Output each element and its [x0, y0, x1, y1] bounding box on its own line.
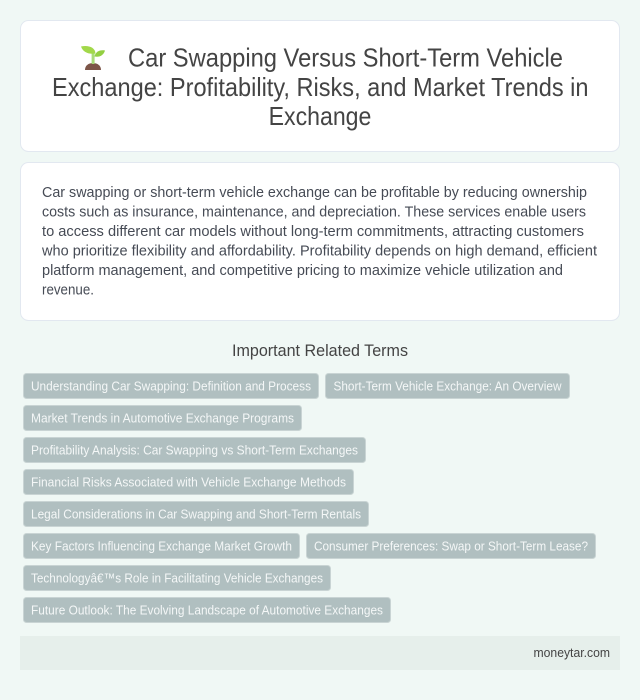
heading: important related terms: Important Related Terms: [232, 341, 408, 360]
panel: description card: [20, 162, 620, 320]
chip: consumer preferences: [306, 534, 596, 558]
title: Exchange: Profitability, Risks, and Market Trends in: [52, 72, 588, 102]
chip: key factors: Key Factors Influencing Exchange Market Growth: [31, 538, 292, 554]
chip: future outlook: Future Outlook: The Evolving Landscape of Automotive Exchanges: [31, 602, 383, 618]
footer: [20, 636, 620, 670]
panel: title card: [20, 20, 620, 152]
description text: who prioritize flexibility and affordability. Profitability depends on high demand, efficient: [41, 242, 598, 260]
title: [52, 42, 588, 131]
footer: moneytar.com: [534, 645, 610, 660]
chip: legal considerations: [24, 502, 368, 526]
chip: key factors: [24, 534, 300, 558]
chip: short-term vehicle exchange: [326, 374, 570, 398]
chip: technology's role: [24, 566, 330, 590]
description text: Car swapping or short-term vehicle exchange can be profitable by reducing ownership: [42, 184, 587, 201]
chip: financial risks: [24, 470, 354, 494]
chip: understanding car swapping: [24, 374, 318, 398]
description text: platform management, and competitive pricing to maximize vehicle utilization and: [42, 262, 563, 279]
chip: market trends: Market Trends in Automotive Exchange Programs: [31, 410, 294, 426]
chip: short-term vehicle exchange: Short-Term Vehicle Exchange: An Overview: [334, 378, 562, 394]
description text: costs such as insurance, maintenance, and depreciation. These services enable users: [42, 204, 586, 220]
description text: [41, 184, 598, 298]
chip: future outlook: [24, 598, 390, 622]
chip: legal considerations: Legal Considerations in Car Swapping and Short-Term Rentals: [31, 506, 361, 522]
icon: seedling: [81, 46, 105, 70]
title: Car Swapping Versus Short-Term Vehicle: [128, 42, 563, 72]
chip: profitability analysis: [24, 438, 366, 462]
chip: technology's role: Technologyâ€™s Role in Facilitating Vehicle Exchanges: [31, 570, 323, 586]
chip: consumer preferences: Consumer Preferences: Swap or Short-Term Lease?: [314, 538, 588, 554]
chip: profitability analysis: Profitability Analysis: Car Swapping vs Short-Term Exchanges: [31, 442, 358, 458]
chip: understanding car swapping: Understanding Car Swapping: Definition and Process: [31, 378, 311, 394]
title: Exchange: [269, 101, 371, 131]
chip: financial risks: Financial Risks Associated with Vehicle Exchange Methods: [31, 474, 346, 490]
description text: revenue.: [42, 282, 94, 298]
description text: to access different car models without long-term commitments, attracting customers: [42, 223, 584, 240]
panel: related terms chips: [24, 374, 596, 622]
chip: market trends: [24, 406, 302, 430]
